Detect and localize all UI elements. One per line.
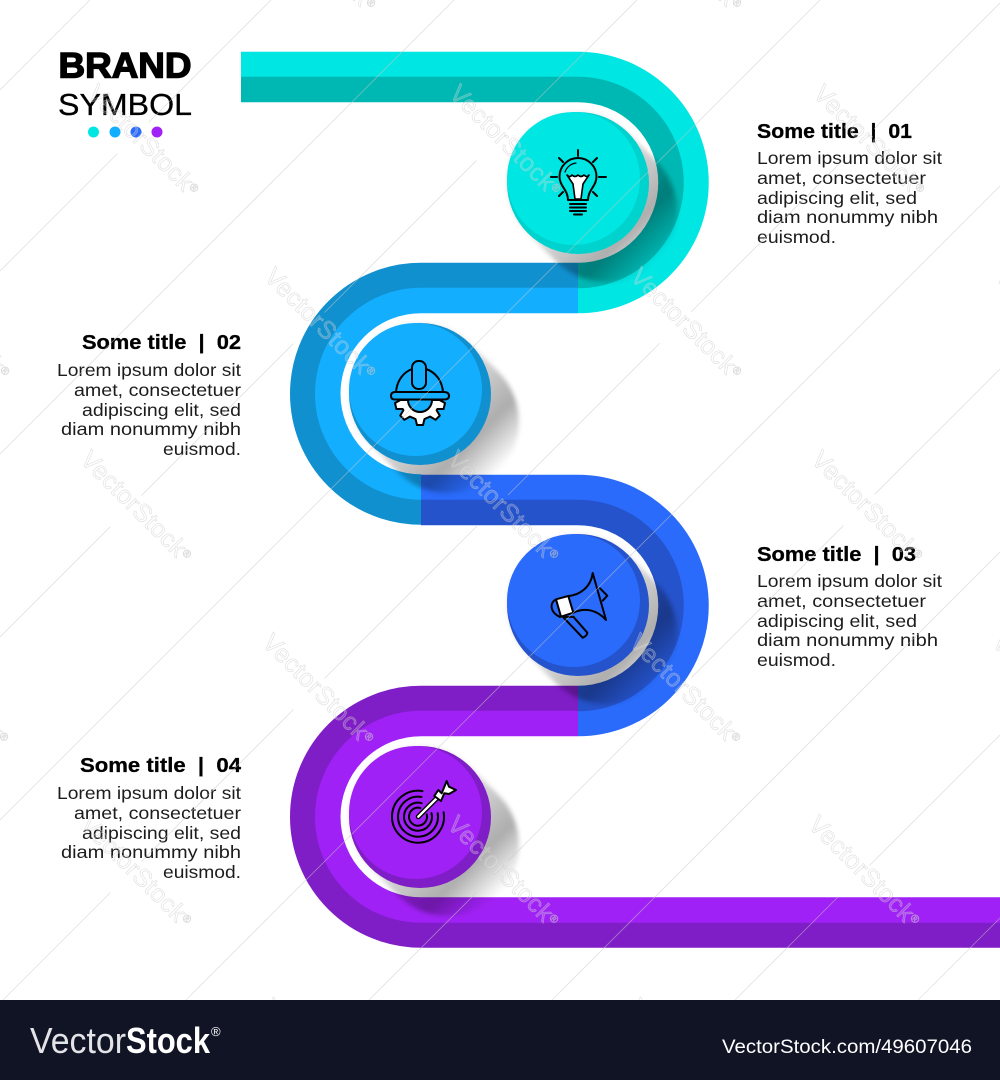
text block: step 4: diam nonummy nibh — [61, 842, 241, 862]
watermarks: ® — [179, 547, 194, 561]
watermarks: VectorStock — [625, 262, 742, 379]
watermarks: VectorStock — [444, 79, 561, 196]
ribbon segment 1: cyan — [241, 64, 696, 300]
footer bar: VectorStock.com/49607046 — [722, 1037, 972, 1058]
text block: step 4: amet, consectetuer — [74, 803, 241, 823]
step 2 circle with shadow — [349, 323, 491, 465]
watermarks: VectorStock — [806, 445, 923, 562]
ribbon segment 2: sky blue — [303, 276, 578, 512]
watermarks: VectorStock — [75, 445, 192, 562]
step 4 circle with shadow — [349, 746, 491, 888]
text block: step 3: Lorem ipsum dolor sit — [757, 571, 942, 591]
text block: step 2: Lorem ipsum dolor sit — [57, 360, 241, 380]
watermarks: VectorStock — [259, 262, 376, 379]
text block: step 1: adipiscing elit, sed — [757, 188, 917, 208]
watermarks: VectorStock — [808, 79, 925, 196]
footer bar: Stock — [126, 1020, 211, 1061]
watermarks: ® — [546, 547, 561, 561]
watermarks: VectorStock — [75, 810, 192, 927]
watermarks: ® — [179, 912, 194, 926]
watermarks: ® — [361, 730, 376, 744]
text block: step 4: Some title | 04 — [80, 754, 242, 777]
watermarks: ® — [910, 547, 925, 561]
watermarks: VectorStock — [82, 79, 199, 196]
ribbon path: four coloured segments — [241, 64, 1000, 935]
text block: step 4: adipiscing elit, sed — [82, 823, 241, 843]
text block: step 3: euismod. — [757, 650, 836, 670]
ribbon segment 3: royal blue — [421, 488, 696, 724]
text block: step 3: adipiscing elit, sed — [757, 611, 917, 631]
watermarks: ® — [186, 181, 201, 195]
watermarks: ® — [912, 181, 927, 195]
text block: step 3: Some title | 03 — [757, 543, 916, 566]
step 3 circle with shadow — [507, 534, 649, 676]
text block: step 2: amet, consectetuer — [74, 380, 241, 400]
watermarks: VectorStock — [442, 810, 559, 927]
brand logo: BRAND — [58, 46, 192, 86]
footer bar — [0, 1000, 1000, 1080]
watermarks: ® — [907, 912, 922, 926]
text block: step 4 — [57, 754, 242, 882]
watermarks: VectorStock — [624, 628, 741, 745]
brand logo: SYMBOL — [58, 87, 192, 122]
icon: target with arrow — [392, 781, 456, 843]
watermarks: VectorStock — [803, 810, 920, 927]
watermarks: VectorStock — [442, 445, 559, 562]
watermarks: ® — [728, 730, 743, 744]
step 1 circle with shadow — [507, 112, 649, 254]
text block: step 3 — [757, 543, 942, 670]
watermarks: ® — [548, 181, 563, 195]
icon: light bulb — [551, 150, 606, 214]
text block: step 1: euismod. — [757, 227, 836, 247]
text block: step 1: Lorem ipsum dolor sit — [757, 148, 942, 168]
ribbon segment 4: purple — [303, 698, 1000, 935]
watermarks: ® — [363, 364, 378, 378]
icon: helmet and gear — [391, 361, 449, 425]
text block: step 4: Lorem ipsum dolor sit — [57, 783, 241, 803]
text block: step 2: Some title | 02 — [82, 331, 241, 354]
text block: step 1 — [757, 120, 942, 247]
icon: megaphone — [552, 573, 607, 638]
text block: step 2: diam nonummy nibh — [61, 419, 241, 439]
brand logo — [58, 46, 192, 138]
text block: step 1: diam nonummy nibh — [757, 207, 938, 227]
watermarks: ® — [546, 912, 561, 926]
text block: step 3: amet, consectetuer — [757, 591, 926, 611]
footer bar: Vector — [30, 1020, 126, 1061]
text block: step 3: diam nonummy nibh — [757, 630, 938, 650]
watermarks: VectorStock — [257, 628, 374, 745]
text block: step 2: euismod. — [163, 439, 241, 459]
watermarks: ® — [729, 364, 744, 378]
footer bar: ® — [211, 1024, 221, 1039]
text block: step 2 — [57, 331, 241, 459]
text block: step 1: amet, consectetuer — [757, 168, 926, 188]
text block: step 1: Some title | 01 — [757, 120, 912, 143]
text block: step 4: euismod. — [163, 862, 241, 882]
text block: step 2: adipiscing elit, sed — [82, 400, 241, 420]
